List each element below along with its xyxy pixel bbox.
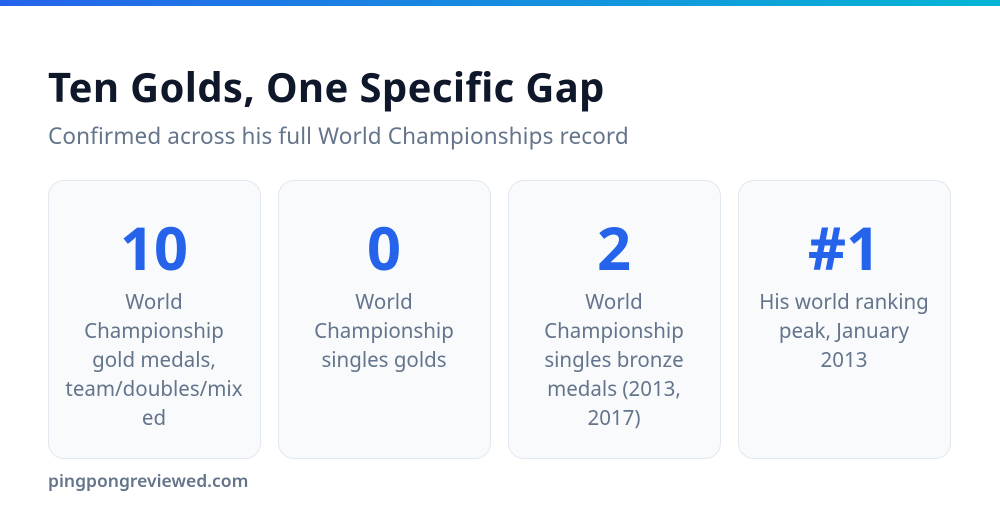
stat label: singles golds [321, 346, 447, 374]
stat label [759, 288, 929, 374]
stat label: team/doubles/mix [65, 375, 243, 403]
stat label: Championship [314, 317, 454, 345]
stat label: World [585, 288, 643, 316]
subtitle: Confirmed across his full World Championships record [48, 120, 629, 151]
stat label: medals (2013, [547, 375, 681, 403]
panel: 0 singles golds [278, 180, 491, 459]
stat label [314, 288, 454, 374]
stat label: Championship [544, 317, 684, 345]
stat number: 2 [597, 207, 631, 288]
panel: 10 golds [48, 180, 261, 459]
stat number: #1 [808, 207, 880, 288]
top gradient bar [0, 0, 1000, 6]
footer source: pingpongreviewed.com [48, 469, 248, 493]
stat label: ed [142, 404, 166, 432]
stat label [544, 288, 684, 432]
stat label: singles bronze [544, 346, 684, 374]
stat label [65, 288, 243, 432]
panel: #1 ranking [738, 180, 951, 459]
stat number: 10 [120, 207, 188, 288]
panel: 2 bronze medals [508, 180, 721, 459]
stat label: peak, January [779, 317, 909, 345]
stat label: Championship [84, 317, 224, 345]
stat number: 0 [367, 207, 401, 288]
stat label: His world ranking [759, 288, 929, 316]
stat label: 2013 [821, 346, 867, 374]
title: Ten Golds, One Specific Gap [48, 59, 605, 114]
stat label: gold medals, [92, 346, 216, 374]
stat label: 2017) [587, 404, 641, 432]
stat label: World [355, 288, 413, 316]
stat label: World [125, 288, 183, 316]
